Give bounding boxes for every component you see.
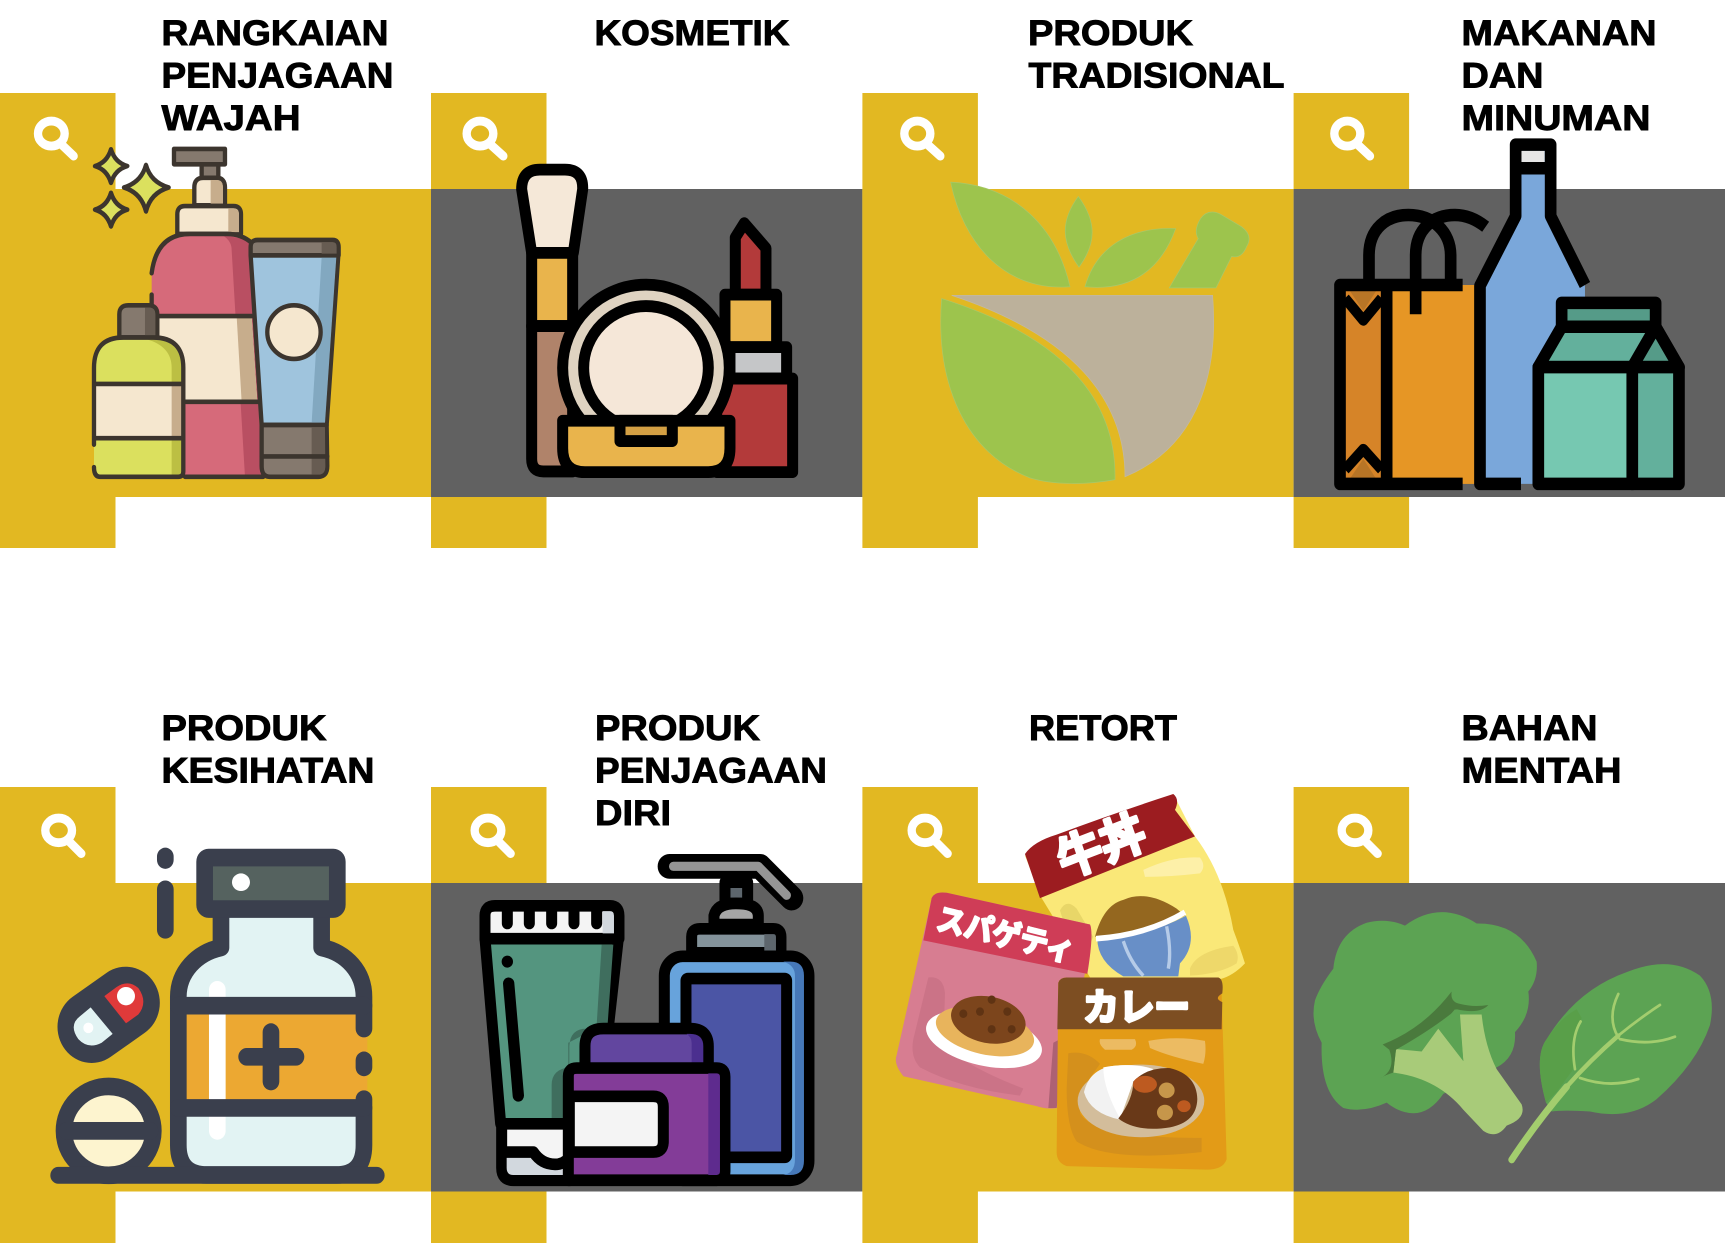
heading: PENJAGAAN [162,56,394,96]
icon: magnifier [912,818,948,854]
panel: rangkaian penjagaan wajah [0,14,431,548]
heading: WAJAH [162,99,300,138]
yellow tab bottom [1294,497,1409,548]
heading: MAKANAN [1462,14,1656,53]
heading: RANGKAIAN [162,14,388,53]
pouch: spaghetti: スパゲティ [934,902,1077,969]
grey band [1294,883,1725,1192]
yellow tab top [431,93,546,189]
heading: KOSMETIK [594,14,790,53]
pouch: gyudon [1025,794,1245,983]
pouch: spaghetti [896,892,1091,1109]
icon: broccoli [1313,912,1537,1134]
heading: BAHAN [1462,709,1598,748]
pouch: curry [1057,977,1227,1170]
yellow band [862,189,1294,497]
icon: cosmetics set [522,170,793,472]
heading: PRODUK [162,709,326,748]
icon: magnifier [467,121,503,156]
yellow tab top [1294,787,1409,883]
panel: produk kesihatan [0,709,431,1243]
heading: MENTAH [1462,752,1622,790]
icon: personal care products [485,866,809,1180]
icon: skincare bottles [94,149,339,477]
yellow band [0,883,431,1192]
panel: retort [862,709,1294,1243]
icon: retort food pouches [896,794,1245,1170]
heading: MINUMAN [1462,99,1650,138]
heading: RETORT [1029,709,1177,748]
yellow band [862,883,1294,1192]
heading: PRODUK [595,709,760,748]
heading [1462,709,1622,790]
heading: DIRI [595,794,671,833]
icon: food and drink [1340,145,1679,484]
heading [595,709,827,833]
heading [1028,14,1284,96]
panel: produk penjagaan diri [431,709,862,1243]
yellow tab top [431,787,546,883]
heading [1462,14,1656,138]
heading: TRADISIONAL [1028,56,1284,96]
icon: magnifier [1342,818,1378,854]
heading: DAN [1462,56,1544,96]
grey band [1294,189,1725,497]
icon: spinach leaf [1512,964,1712,1160]
icon: magnifier [38,121,74,156]
heading [162,14,394,138]
panel: makanan dan minuman [1294,14,1725,548]
yellow band [0,189,431,497]
panel: bahan mentah [1294,709,1725,1243]
grey band [431,189,862,497]
yellow tab bottom [431,1192,546,1243]
yellow tab bottom [431,497,546,548]
panel: produk tradisional [862,14,1294,548]
panel: kosmetik [431,14,862,548]
heading: PENJAGAAN [595,752,827,790]
icon: magnifier [45,818,81,854]
yellow tab [862,93,978,548]
yellow tab [862,787,978,1243]
heading: PRODUK [1028,14,1193,53]
yellow tab bottom [1294,1192,1409,1243]
icon: magnifier [475,818,511,854]
yellow tab [0,787,116,1243]
pouch: gyudon: 牛丼 [1051,805,1152,888]
yellow tab top [1294,93,1409,189]
icon: magnifier [904,121,940,156]
yellow tab [0,93,116,548]
heading [162,709,374,790]
pouch: curry: カレー [1083,986,1190,1028]
icon: mortar with herbs [941,182,1249,483]
heading: KESIHATAN [162,752,374,790]
icon: medicine bottle and pills [58,856,377,1175]
icon: magnifier [1334,121,1370,156]
grey band [431,883,862,1192]
